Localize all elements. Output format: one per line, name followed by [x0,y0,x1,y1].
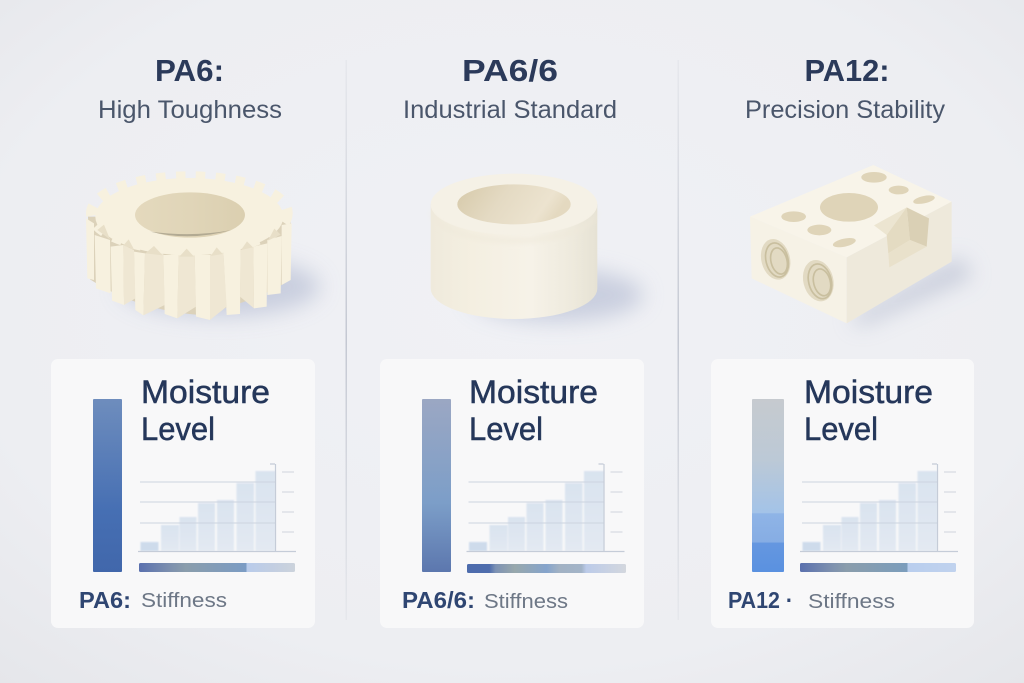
moisture bar [422,399,451,572]
heading: PA12 [745,53,945,124]
panel: PA12 moisture card [711,359,974,628]
bar chart [800,464,958,552]
heading: PA12: Precision Stability [745,96,945,124]
stiffness strip [800,563,956,572]
stiffness label [79,587,227,613]
moisture bar [93,399,122,572]
column: PA6 [51,53,320,628]
icon: nylon machined block [750,165,973,327]
stiffness label: Stiffness [141,590,227,612]
stiffness label: PA6: [79,587,131,613]
panel title: Level [141,411,215,447]
heading: PA6/6 [403,53,617,124]
icon: nylon bushing [431,174,643,322]
panel title: Moisture [141,374,270,410]
stiffness label: Stiffness [808,591,895,613]
front tooth notches [97,225,281,257]
bar chart [466,464,624,552]
panel title: Moisture [469,374,598,410]
panel title [141,374,270,447]
notch [874,207,929,267]
stiffness label: PA12 · [728,587,793,613]
panel: PA6 moisture card [51,359,315,628]
heading: PA6/6: Industrial Standard [403,96,617,124]
heading: PA6: High Toughness [98,96,282,124]
bar chart [138,464,296,552]
heading: PA6/6: PA6/6 [462,53,558,88]
threaded holes [757,236,838,305]
panel title: Level [469,411,543,447]
stiffness strip [139,563,295,572]
heading: PA6: PA6: [155,53,224,88]
stiffness label: PA6/6: [402,587,475,613]
gear teeth [86,218,292,320]
icon: nylon gear [86,178,320,320]
heading: PA12: PA12: [804,53,890,88]
heading: PA6 [98,53,282,124]
stiffness strip [467,564,626,573]
panel title [469,374,598,447]
stiffness label: Stiffness [484,591,568,613]
panel title [804,374,933,447]
top holes [781,172,936,249]
panel title: Moisture [804,374,933,410]
panel title: Level [804,411,878,447]
panel: PA6/6 moisture card [380,359,644,628]
moisture bar [752,399,784,572]
stiffness label [402,587,568,613]
column: PA12 [711,53,974,628]
stiffness label [728,587,895,613]
column: PA6/6 [380,53,644,628]
